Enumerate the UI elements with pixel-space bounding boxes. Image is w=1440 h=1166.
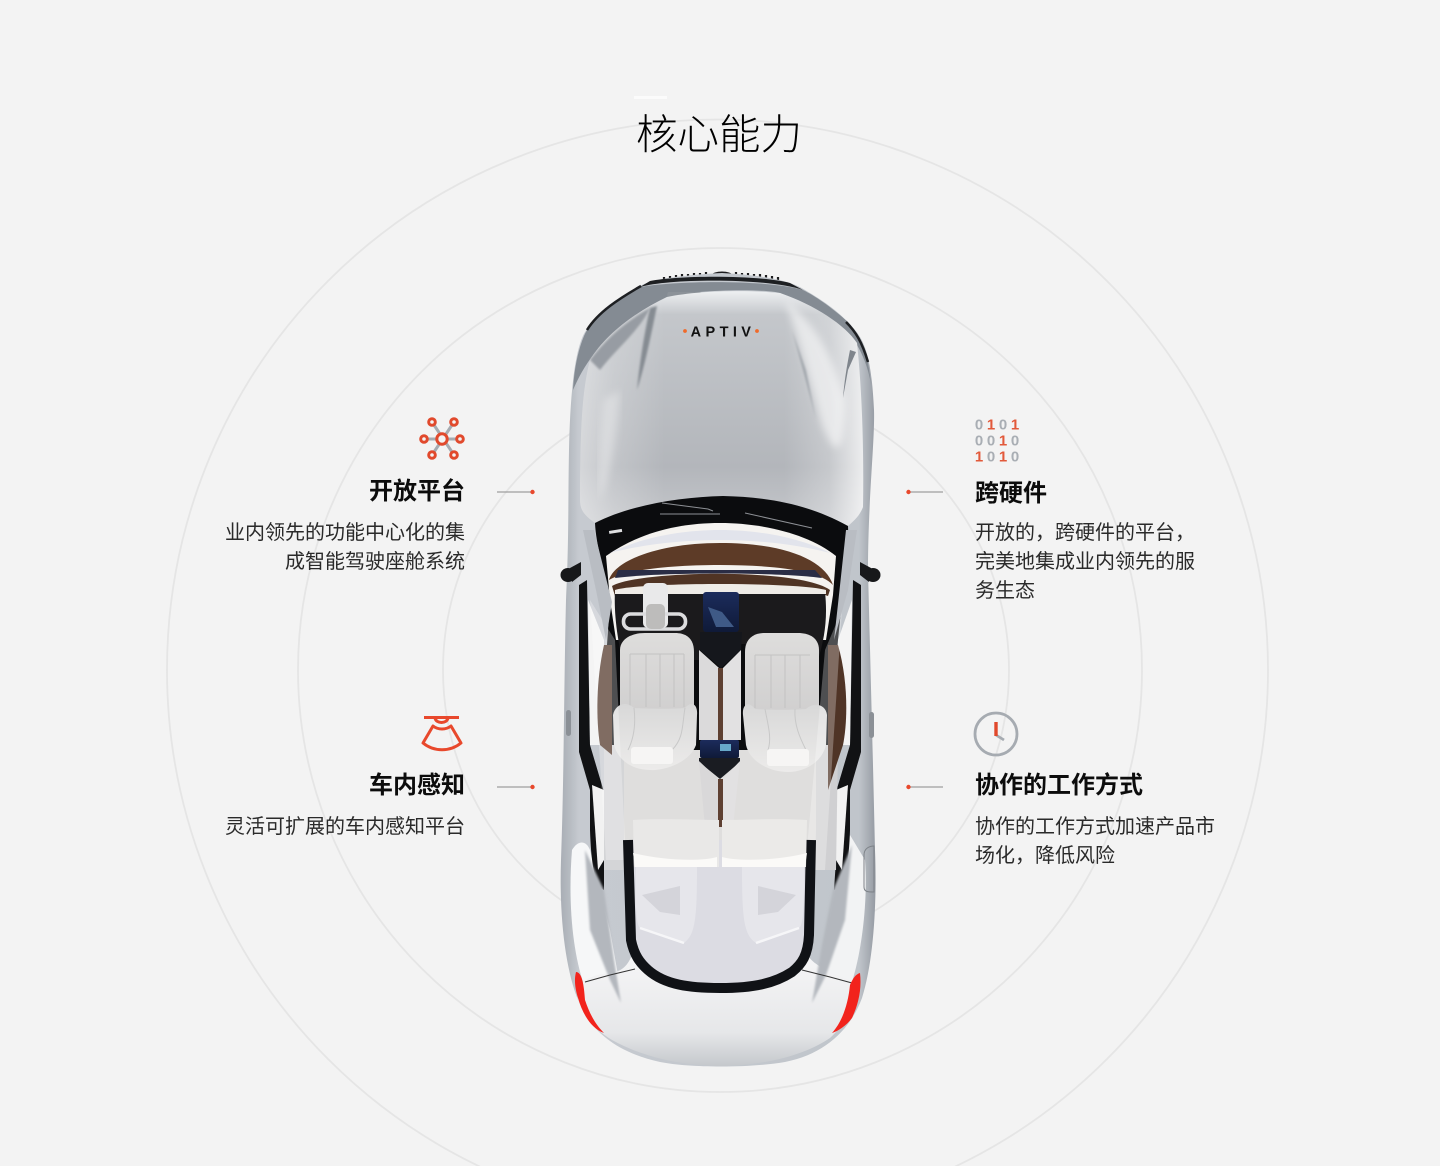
car: brown trim arc — [609, 543, 833, 585]
connector — [906, 490, 943, 494]
car: windshield black frame — [595, 496, 848, 750]
car: brown interior side trim — [597, 645, 612, 755]
description: 协作的工作方式加速产品市 — [975, 816, 1215, 838]
connector — [906, 784, 943, 790]
description: 成智能驾驶座舱系统 — [285, 551, 465, 573]
car: rear display and console — [699, 740, 740, 827]
icon: binary digits: 1 — [975, 448, 983, 465]
heading: 协作的工作方式 — [975, 772, 1143, 799]
car: APTIV logo: APTIV — [691, 324, 755, 340]
title accent bar — [634, 96, 667, 99]
description — [975, 522, 1195, 602]
icon: clock — [974, 712, 1018, 756]
car: door openings — [579, 580, 861, 890]
car: console — [699, 650, 741, 740]
feature: cross hardware — [906, 416, 1195, 602]
icon: binary digits: 0 — [975, 416, 983, 434]
car: body shell — [561, 273, 876, 1066]
description — [225, 522, 465, 573]
description: 开放的，跨硬件的平台， — [975, 522, 1195, 544]
heading: 开放平台 — [369, 478, 465, 505]
icon: binary digits: 0 — [1011, 448, 1019, 465]
description: 完美地集成业内领先的服 — [975, 551, 1195, 573]
icon: binary digits: 1 — [999, 448, 1007, 465]
connector — [497, 490, 535, 494]
icon: binary digits: 0 — [1011, 432, 1019, 450]
car: front left seat — [613, 633, 697, 770]
description: 业内领先的功能中心化的集 — [225, 522, 465, 544]
car: seam lines — [585, 969, 852, 983]
car: translucent door glass — [590, 600, 842, 870]
feature: open platform — [225, 417, 535, 573]
car: side mirrors — [560, 562, 880, 582]
feature: in-cabin sensing — [225, 716, 535, 838]
description: 务生态 — [975, 580, 1035, 602]
icon: sensing cone — [421, 716, 462, 752]
icon: binary digits: 0 — [987, 432, 995, 450]
heading: 车内感知 — [369, 772, 465, 799]
icon: binary digits — [975, 416, 1019, 465]
car: dark footwell — [615, 590, 826, 660]
car: front right seat — [743, 633, 827, 772]
car: rear trunk recess — [636, 867, 804, 943]
car: rear seats — [633, 819, 807, 867]
icon: binary digits: 1 — [1011, 416, 1019, 434]
icon: binary digits: 0 — [975, 432, 983, 450]
car: nose edge and slate band — [573, 282, 871, 390]
car: steering wheel — [624, 583, 686, 629]
car: rear body — [578, 955, 856, 1066]
icon: network nodes — [419, 417, 465, 460]
car: body side white panels — [570, 835, 866, 985]
car: A pillars — [583, 530, 612, 640]
title: 核心能力 — [636, 101, 802, 161]
feature: collaborative way of working — [906, 712, 1215, 867]
icon: binary digits: 0 — [999, 416, 1007, 434]
heading: 跨硬件 — [975, 480, 1047, 507]
car: main display — [700, 592, 742, 668]
icon: binary digits: 0 — [987, 448, 995, 465]
connector — [497, 784, 535, 790]
car: rear cabin floor — [624, 750, 816, 868]
car: tail lights — [575, 972, 861, 1033]
car: rear side reflections — [585, 850, 621, 1003]
description — [975, 816, 1215, 867]
description: 灵活可扩展的车内感知平台 — [225, 816, 465, 838]
icon: binary digits: 1 — [987, 416, 995, 434]
car: wiper details — [660, 503, 812, 528]
car: door handles — [566, 710, 874, 738]
car: hood — [580, 291, 863, 526]
car: hood creases — [590, 300, 856, 500]
car: rear trunk ring — [628, 840, 811, 988]
icon: binary digits: 1 — [999, 432, 1007, 450]
car: side glass interior panels — [604, 745, 838, 870]
description: 场化，降低风险 — [975, 845, 1115, 867]
car: cabin cream dash — [606, 523, 836, 640]
car: grille teeth — [664, 272, 778, 282]
